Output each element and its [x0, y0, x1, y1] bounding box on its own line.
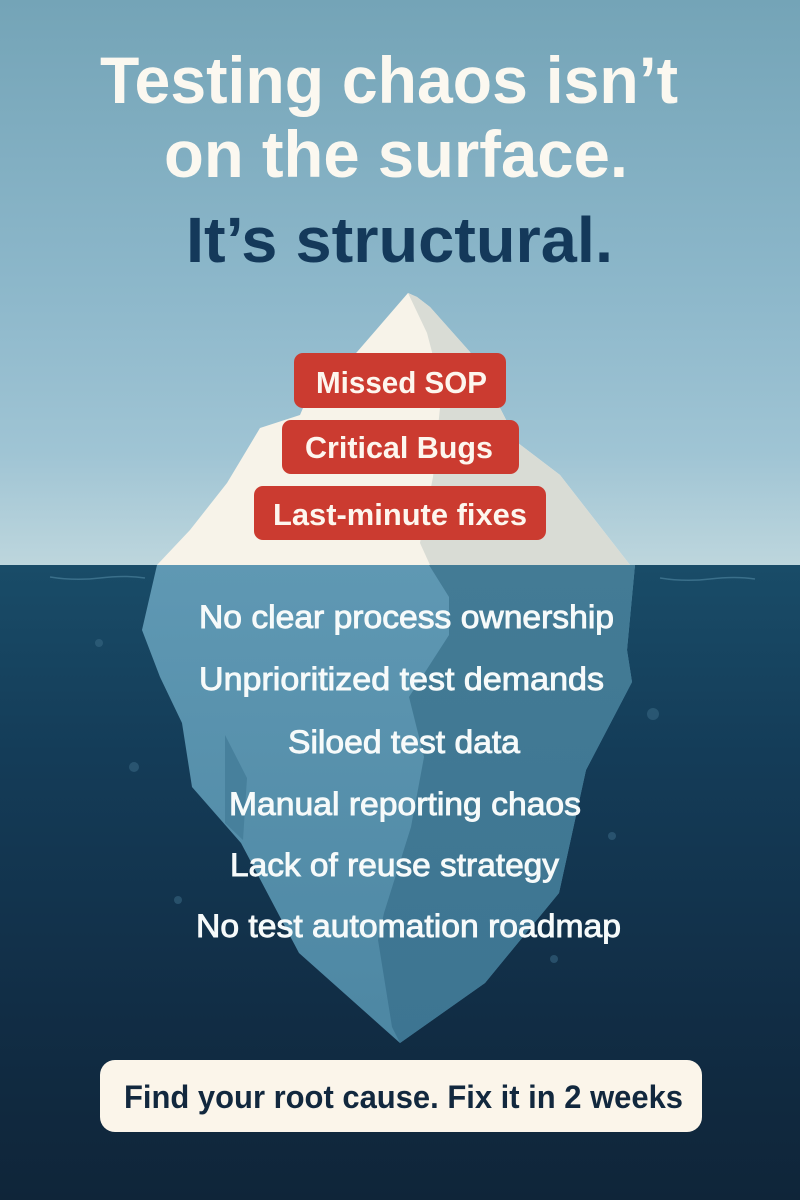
- surface symptom labels: [254, 353, 546, 540]
- title line 1: Testing chaos isn’t: [100, 43, 678, 117]
- submerged body: [142, 565, 635, 1043]
- label: Last-minute fixes: Last-minute fixes: [273, 497, 527, 532]
- label: Last-minute fixes: [254, 486, 546, 540]
- submerged shaded facet: [378, 565, 635, 1043]
- waterline ripples: [50, 576, 755, 580]
- cause 6: No test automation roadmap: [196, 908, 621, 944]
- label: Missed SOP: Missed SOP: [316, 365, 487, 400]
- tip shaded facet: [408, 293, 630, 565]
- title: [100, 43, 678, 276]
- sky background: [0, 0, 800, 565]
- call to action: Find your root cause. Fix it in 2 weeks: [124, 1079, 683, 1115]
- iceberg tip: [157, 293, 630, 565]
- label: Missed SOP: [294, 353, 506, 408]
- cause 4: Manual reporting chaos: [229, 786, 581, 822]
- title line 2: on the surface.: [164, 117, 628, 191]
- air bubbles: [95, 639, 659, 963]
- call to action: [100, 1060, 702, 1132]
- cause 1: No clear process ownership: [199, 599, 614, 635]
- submerged iceberg: [142, 565, 635, 1043]
- label: Critical Bugs: Critical Bugs: [305, 430, 493, 465]
- cause 3: Siloed test data: [288, 724, 520, 760]
- title line 3: It’s structural.: [186, 204, 613, 276]
- cause 5: Lack of reuse strategy: [230, 847, 559, 883]
- root causes list: [196, 599, 621, 944]
- small shaded facet: [225, 735, 247, 840]
- label: Critical Bugs: [282, 420, 519, 474]
- tip body: [157, 293, 630, 565]
- water background: [0, 565, 800, 1200]
- cause 2: Unprioritized test demands: [199, 661, 604, 697]
